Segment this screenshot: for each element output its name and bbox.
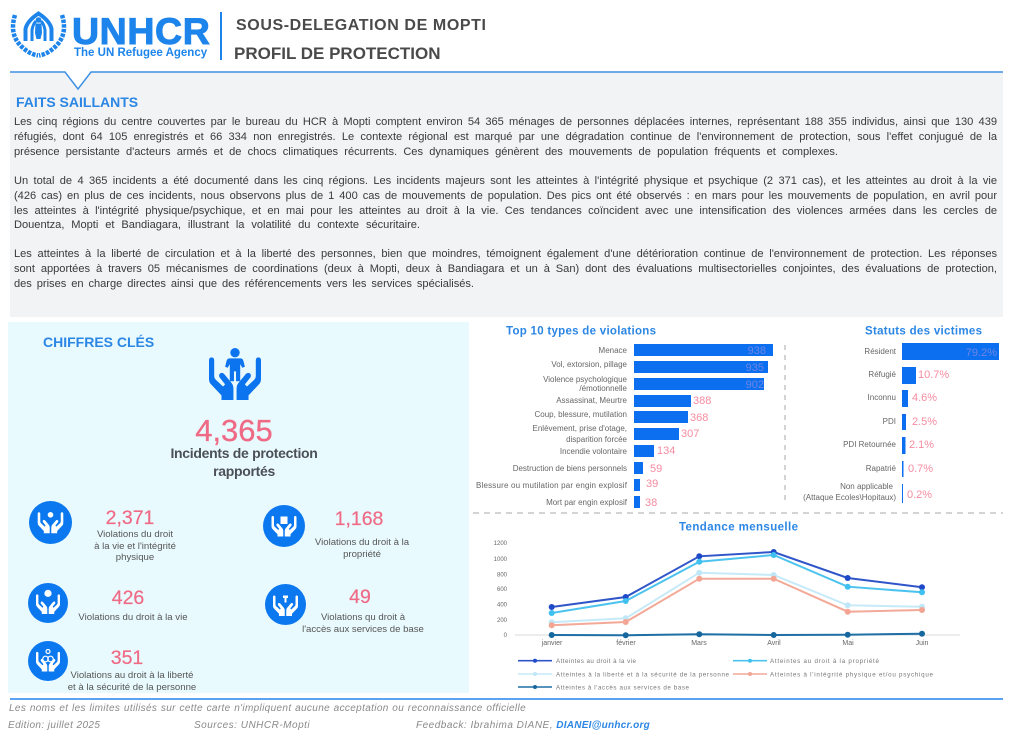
label: 1,168	[315, 537, 410, 560]
logo divider	[220, 12, 222, 60]
logo: tagline: The UN Refugee Agency	[74, 47, 207, 59]
figure: 2,371: 2,371	[106, 507, 154, 529]
chart: top 10 violation types: 902	[746, 379, 764, 391]
text block: paragraph 2: les atteintes à l'intégrité physique/psychique, et en mai pour les atteintes au droit à la vie. Ces tendances coïncident avec une intensification des violences armées dans les cercles de	[14, 205, 997, 217]
chart title: Top 10 types de violations	[506, 326, 656, 338]
chart: top 10 violation types: 134	[657, 445, 675, 457]
heading: key figures: CHIFFRES CLÉS	[43, 334, 154, 350]
series: services de base	[549, 631, 925, 638]
chart: top 10 violation types: Destruction de biens personnels	[513, 464, 627, 473]
chart: victim status: PDI Retournée	[843, 440, 897, 449]
chart: monthly trend: Avril	[767, 640, 781, 647]
chart title: Tendance mensuelle	[679, 522, 798, 534]
chart: monthly trend: Mars	[691, 640, 707, 647]
figure: 351: 351	[111, 647, 143, 669]
text block: paragraph 3: Les atteintes à la liberté de circulation et à la liberté des personnes, bien que moindres, témoignent également d'une détérioration continue de l'environnement de protection. Les réponses	[14, 248, 997, 260]
chart: monthly trend: 0	[504, 633, 508, 639]
chart: top 10 violation types: 38	[645, 497, 657, 509]
legend: Atteintes au droit à la vie	[556, 658, 637, 665]
text block: paragraph 3	[14, 248, 997, 290]
label: 49: Violations qu droit à	[321, 612, 405, 623]
label: 351: et à la sécurité de la personne	[68, 682, 196, 693]
label: 49: l'accès aux services de base	[302, 624, 424, 635]
chart: top 10 violation types: Enlèvement, prise d'otage,	[533, 424, 627, 433]
icon: property	[263, 505, 305, 547]
icon: basic services	[265, 584, 306, 625]
chart: top 10 violation types: Assassinat, Meurtre	[556, 396, 628, 405]
chart: victim status: 79.2%	[966, 347, 997, 359]
chart: top 10 violation types: Blessure ou mutilation par engin explosif	[476, 481, 628, 490]
chart: top 10 violation types: 935	[746, 362, 764, 374]
heading: report title: PROFIL DE PROTECTION	[234, 44, 441, 63]
text block: paragraph 1: réfugiés, dont 64 105 enregistrés et 66 334 non enregistrés. Le contexte régional est marqué par une dégradation continue de l'environnement de protection, sous l'effet conjugué de la	[14, 131, 997, 143]
caption: total incidents: Incidents de protection	[170, 445, 318, 461]
chart: victim status: Réfugié	[868, 370, 897, 379]
label: 351	[68, 670, 196, 693]
legend	[518, 658, 934, 692]
chart: victim status: 4.6%	[912, 392, 937, 404]
label: 1,168: propriété	[343, 549, 381, 560]
label: 2,371: Violations du droit	[97, 529, 173, 540]
chart: monthly trend: 400	[497, 602, 508, 608]
chart: victim status: (Attaque Ecoles\Hopitaux)	[803, 493, 896, 502]
text block: paragraph 3: sont apportées à travers 05 mécanismes de coordinations (deux à Mopti, deux à Bandiagara et un à San) dont des évaluations multisectorielles conjointes, des évaluations de protection,	[14, 263, 997, 275]
header rule with notch	[10, 71, 1003, 90]
footer rule	[10, 698, 1003, 700]
chart: top 10 violation types: Menace	[599, 346, 628, 355]
text block: paragraph 1	[14, 116, 998, 158]
label: 2,371	[94, 529, 176, 563]
icon: right to life	[28, 583, 68, 623]
edition date: Edition: juillet 2025	[8, 720, 100, 731]
series: intégrité physique	[549, 576, 925, 628]
figure: 426: 426	[112, 587, 144, 609]
chart: top 10 violation types: 368	[690, 412, 708, 424]
legend: Atteintes à la liberté et à la sécurité de la personne	[556, 672, 730, 678]
chart: monthly trend: 600	[497, 587, 508, 593]
chart: victim status: Résident	[864, 347, 897, 356]
text block: paragraph 3: des prises en charge directes ainsi que des référencements vers les services spécialisés.	[14, 278, 474, 290]
series: droit à la propriété	[549, 552, 925, 616]
legend: Atteintes au droit à la propriété	[770, 658, 880, 665]
panel: key figures	[8, 322, 469, 693]
chart: top 10 violation types: 39	[646, 478, 658, 490]
chart: victim status	[803, 326, 999, 503]
chart: monthly trend: 1000	[494, 557, 508, 563]
chart: top 10 violation types: Coup, blessure, mutilation	[534, 410, 627, 419]
panel: highlights background	[10, 72, 1003, 317]
chart: top 10 violation types: Violence psychologique	[543, 375, 628, 384]
chart: monthly trend: Mai	[842, 640, 854, 647]
logo: UNHCR wordmark: UNHCR	[72, 10, 210, 52]
logo: UNHCR emblem	[10, 11, 66, 58]
chart: victim status: 0.7%	[908, 463, 933, 475]
chart: monthly trend: 200	[497, 618, 508, 624]
legend: Atteintes à l'accès aux services de base	[556, 684, 690, 692]
chart: monthly trend	[494, 522, 960, 692]
figure: 1,168: 1,168	[335, 508, 383, 530]
chart: victim status: 10.7%	[918, 369, 949, 381]
chart: top 10 violation types: 938	[748, 345, 766, 357]
disclaimer: Les noms et les limites utilisés sur cette carte n'impliquent aucune acceptation ou reconnaissance officielle	[9, 703, 526, 714]
label: 351: Violations au droit à la liberté	[70, 670, 194, 681]
chart: monthly trend: Juin	[916, 640, 929, 647]
caption: total incidents	[170, 445, 318, 479]
chart: victim status: Inconnu	[868, 393, 896, 402]
chart: monthly trend: 1200	[494, 541, 508, 547]
chart: top 10 violation types: disparition forcée	[566, 435, 628, 444]
text block: paragraph 2: Un total de 4 365 incidents a été documenté dans les cinq régions. Les incidents majeurs sont les atteintes à l'intégrité physique et psychique (2 371 cas), et les atteintes au droit à la vie	[14, 175, 997, 187]
text block: paragraph 1: présence persistante d'acteurs armés et de chocs climatiques récurrents. Ces dynamiques génèrent des mouvements de population fréquents et complexes.	[14, 146, 838, 158]
icon: hands protecting a person	[209, 348, 261, 400]
legend: Atteintes à l'intégrité physique et/ou psychique	[770, 672, 934, 678]
text block: paragraph 1: Les cinq régions du centre couvertes par le bureau du HCR à Mopti comptent environ 54 365 ménages de personnes déplacées internes, représentant 188 355 individus, ainsi que 130 439	[14, 116, 997, 128]
chart: top 10 violation types: /émotionnelle	[579, 384, 628, 393]
text block: paragraph 2	[14, 175, 997, 231]
feedback contact: Feedback: Ibrahima DIANE, DIANEI@unhcr.org	[416, 720, 650, 731]
label: 1,168: Violations du droit à la	[315, 537, 409, 548]
text block: paragraph 2: (426 cas) en plus de ces incidents, nous observons plus de 1 400 cas de mouvements de population. Des pics ont été observés : en mars pour les mouvements de population, en avril pour	[14, 190, 997, 202]
icon: physical integrity	[29, 501, 72, 544]
chart title: Statuts des victimes	[865, 326, 982, 338]
chart: top 10 violation types: 307	[681, 428, 699, 440]
icon: liberty and security	[28, 641, 68, 681]
chart: monthly trend: février	[616, 640, 636, 647]
chart: top 10 violation types: 388	[693, 395, 711, 407]
chart: top 10 violation types	[476, 326, 773, 509]
chart: monthly trend: janvier	[541, 640, 563, 647]
big number: total incidents: 4,365	[195, 413, 273, 448]
chart: victim status: 2.5%	[912, 416, 937, 428]
heading: highlights: FAITS SAILLANTS	[16, 94, 138, 110]
caption: total incidents: rapportés	[213, 462, 275, 478]
chart: victim status: 2.1%	[909, 439, 934, 451]
chart: monthly trend: 800	[497, 572, 508, 578]
series: droit à la vie	[549, 549, 925, 610]
series: liberté et sécurité	[549, 570, 925, 625]
chart: top 10 violation types: 59	[650, 463, 662, 475]
label: 49	[302, 612, 424, 635]
chart: victim status: PDI	[883, 417, 896, 426]
chart: victim status: 0.2%	[907, 489, 932, 501]
chart: victim status: Rapatrié	[866, 464, 897, 473]
chart: top 10 violation types: Mort par engin explosif	[546, 498, 628, 507]
heading: office name: SOUS-DELEGATION DE MOPTI	[236, 17, 487, 34]
chart: top 10 violation types: Vol, extorsion, pillage	[551, 360, 628, 369]
chart dividers	[473, 345, 1003, 514]
text block: paragraph 2: Douentza, Mopti et Bandiagara, illustrant la volatilité du contexte sécuritaire.	[14, 219, 420, 231]
figure: 49: 49	[349, 586, 371, 608]
label: 2,371: physique	[116, 552, 154, 563]
chart: top 10 violation types: Incendie volontaire	[560, 447, 628, 456]
label: 426: Violations du droit à la vie	[78, 612, 188, 623]
chart: victim status: Non applicable	[840, 482, 894, 491]
label: 2,371: à la vie et l'intégrité	[94, 541, 176, 552]
sources: Sources: UNHCR-Mopti	[194, 720, 310, 731]
